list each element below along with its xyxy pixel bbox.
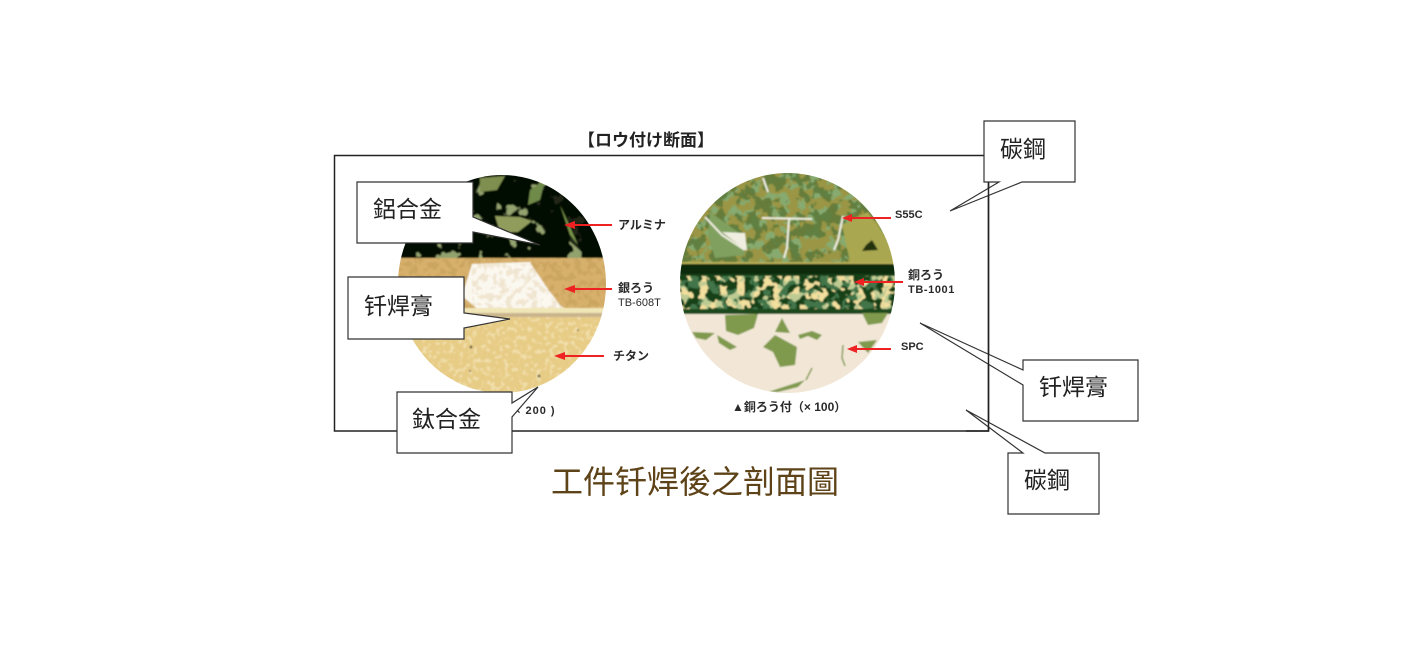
callout: solder paste right [920,323,1138,421]
callout: carbon steel top [950,121,1075,211]
callout: carbon steel bottom: 碳鋼 [1024,467,1070,493]
callout: solder paste right: 钎焊膏 [1039,374,1108,400]
left red arrows and labels [514,218,666,417]
callout: solder paste left [348,277,510,339]
label: copper filler: 銅ろう [908,267,944,282]
titanium layer [412,316,601,392]
label: titanium: チタン [613,349,649,363]
callout: carbon steel top: 碳鋼 [1000,136,1046,162]
micrograph: aluminium-titanium joint [395,170,610,397]
SPC layer [678,313,898,398]
arrow: titanium [554,352,604,360]
label: magnification right: ▲銅ろう付（× 100） [732,399,846,414]
S55C layer [678,170,898,266]
label: S55C: S55C [895,209,923,221]
arrow: S55C [842,214,891,222]
label: brazing filler: 銀ろう [618,281,654,295]
arrow: brazing filler [564,285,612,293]
callout: carbon steel bottom [966,410,1099,514]
callout: titanium alloy [397,387,538,453]
caption: 工件钎焊後之剖面圖 [551,464,839,500]
callout: solder paste left: 钎焊膏 [364,293,433,319]
micrograph: steel joint [678,170,898,398]
frame title: 【ロウ付け断面】 [578,130,714,150]
brazing layer [395,258,610,318]
right red arrows and labels [732,209,955,414]
label: TB-608T: TB-608T [618,297,661,309]
callout: aluminium alloy: 鋁合金 [373,196,442,222]
frame [334,156,988,431]
label: TB-1001: TB-1001 [908,284,955,296]
label: magnification left: × 200 ) [514,405,556,417]
callout: titanium alloy: 鈦合金 [412,406,481,432]
callout: aluminium alloy [357,182,540,245]
label: SPC: SPC [901,341,924,353]
arrow: SPC [847,345,891,353]
arrow: copper filler [854,278,903,286]
arrow: alumina [564,221,612,229]
alumina layer [400,175,604,259]
brazing layer [678,264,898,315]
label: alumina: アルミナ [618,218,666,232]
